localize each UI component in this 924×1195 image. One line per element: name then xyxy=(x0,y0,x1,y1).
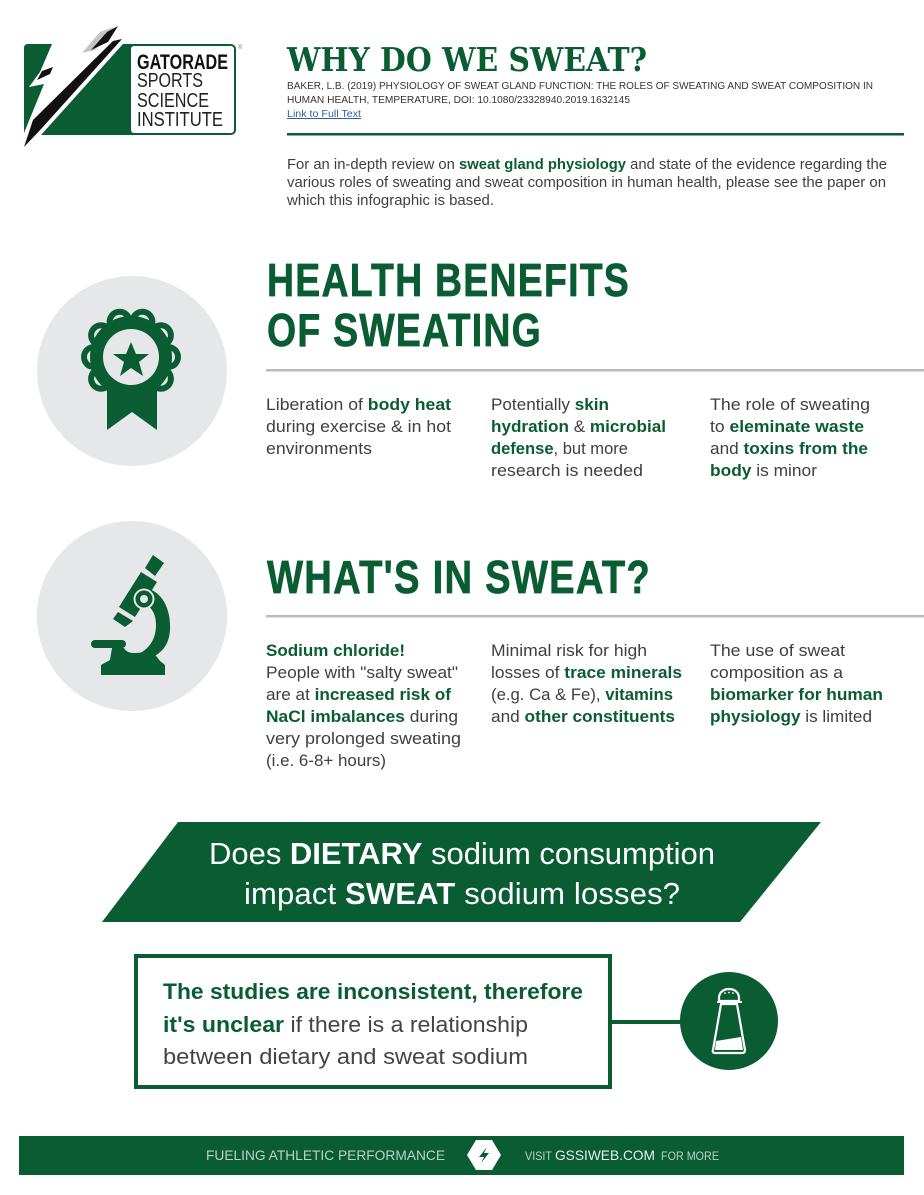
footer bar: FOR MORE xyxy=(661,1149,719,1163)
text: sodium chloride: NaCl imbalances during xyxy=(266,708,458,726)
callout: studies are inconsistent: The studies are inconsistent, therefore xyxy=(163,979,583,1004)
citation: BAKER, L.B. (2019) PHYSIOLOGY OF SWEAT GLAND FUNCTION: THE ROLES OF SWEATING AND SWEAT COMPOSITION IN xyxy=(287,81,873,92)
text: trace minerals xyxy=(491,642,682,726)
citation: HUMAN HEALTH, TEMPERATURE, DOI: 10.1080/23328940.2019.1632145 xyxy=(287,95,630,106)
footer bar: GSSIWEB.COM xyxy=(555,1147,655,1163)
intro text: various roles of sweating and sweat composition in human health, please see the paper on xyxy=(287,175,886,191)
callout: studies are inconsistent: it's unclear if there is a relationship xyxy=(163,1012,528,1037)
icon: hexagon bolt xyxy=(467,1140,501,1170)
text: trace minerals: losses of trace minerals xyxy=(491,664,682,682)
heading: health benefits: HEALTH BENEFITS xyxy=(267,254,630,306)
text: trace minerals: and other constituents xyxy=(491,708,675,726)
logo: Gatorade Sports Science Institute xyxy=(24,26,243,147)
text: waste and toxins xyxy=(710,396,870,480)
text: waste and toxins: and toxins from the xyxy=(710,440,868,458)
text: sodium chloride xyxy=(266,642,461,770)
text: biomarker: composition as a xyxy=(710,664,844,682)
text: skin hydration: research is needed xyxy=(491,462,643,480)
link to full text: Link to Full Text xyxy=(287,109,361,120)
text: body heat: during exercise & in hot xyxy=(266,418,451,436)
text: sodium chloride: are at increased risk of xyxy=(266,686,452,704)
footer bar: VISIT xyxy=(525,1149,553,1163)
text: body heat xyxy=(266,396,452,458)
banner: dietary sodium question xyxy=(102,822,821,922)
text: biomarker xyxy=(710,642,883,726)
icon: medal xyxy=(37,276,227,466)
text: biomarker: biomarker for human xyxy=(710,686,883,704)
icon: microscope xyxy=(37,521,227,711)
intro text xyxy=(286,157,887,209)
banner: dietary sodium question: impact SWEAT sodium losses? xyxy=(244,876,680,911)
text: waste and toxins: The role of sweating xyxy=(710,396,870,414)
logo: Gatorade Sports Science Institute: SCIENCE xyxy=(137,90,209,112)
intro text: which this infographic is based. xyxy=(286,193,494,209)
banner: dietary sodium question: Does DIETARY sodium consumption xyxy=(209,836,715,871)
text: skin hydration: hydration & microbial xyxy=(491,418,666,436)
text: sodium chloride: People with "salty sweat" xyxy=(266,664,458,682)
logo: Gatorade Sports Science Institute: GATORADE xyxy=(137,51,228,74)
text: sodium chloride: (i.e. 6-8+ hours) xyxy=(266,752,386,770)
intro text: For an in-depth review on sweat gland physiology and state of the evidence regarding the xyxy=(287,157,887,173)
text: sodium chloride: Sodium chloride! xyxy=(266,642,405,660)
footer bar xyxy=(19,1136,904,1175)
heading: health benefits xyxy=(267,254,630,356)
title: WHY DO WE SWEAT? xyxy=(286,40,647,79)
heading: what's in sweat: WHAT'S IN SWEAT? xyxy=(267,551,651,603)
icon: salt shaker xyxy=(680,972,778,1070)
heading: health benefits: OF SWEATING xyxy=(267,304,542,356)
text: body heat: environments xyxy=(266,440,372,458)
text: sodium chloride: very prolonged sweating xyxy=(266,730,461,748)
callout: studies are inconsistent: between dietary and sweat sodium xyxy=(163,1044,528,1069)
logo: Gatorade Sports Science Institute: ® xyxy=(238,44,243,51)
logo: Gatorade Sports Science Institute: SPORTS xyxy=(137,70,203,92)
logo: Gatorade Sports Science Institute: INSTITUTE xyxy=(137,109,223,131)
callout: studies are inconsistent xyxy=(136,956,610,1087)
text: skin hydration xyxy=(491,396,666,480)
footer bar: FUELING ATHLETIC PERFORMANCE xyxy=(206,1147,445,1163)
text: skin hydration: Potentially skin xyxy=(491,396,609,414)
text: trace minerals: (e.g. Ca & Fe), vitamins xyxy=(491,686,673,704)
text: biomarker: physiology is limited xyxy=(710,708,872,726)
citation xyxy=(287,81,873,106)
text: waste and toxins: to eleminate waste xyxy=(710,418,864,436)
text: waste and toxins: body is minor xyxy=(710,462,818,480)
text: biomarker: The use of sweat xyxy=(710,642,845,660)
text: body heat: Liberation of body heat xyxy=(266,396,452,414)
text: trace minerals: Minimal risk for high xyxy=(491,642,647,660)
text: skin hydration: defense, but more xyxy=(491,440,628,458)
